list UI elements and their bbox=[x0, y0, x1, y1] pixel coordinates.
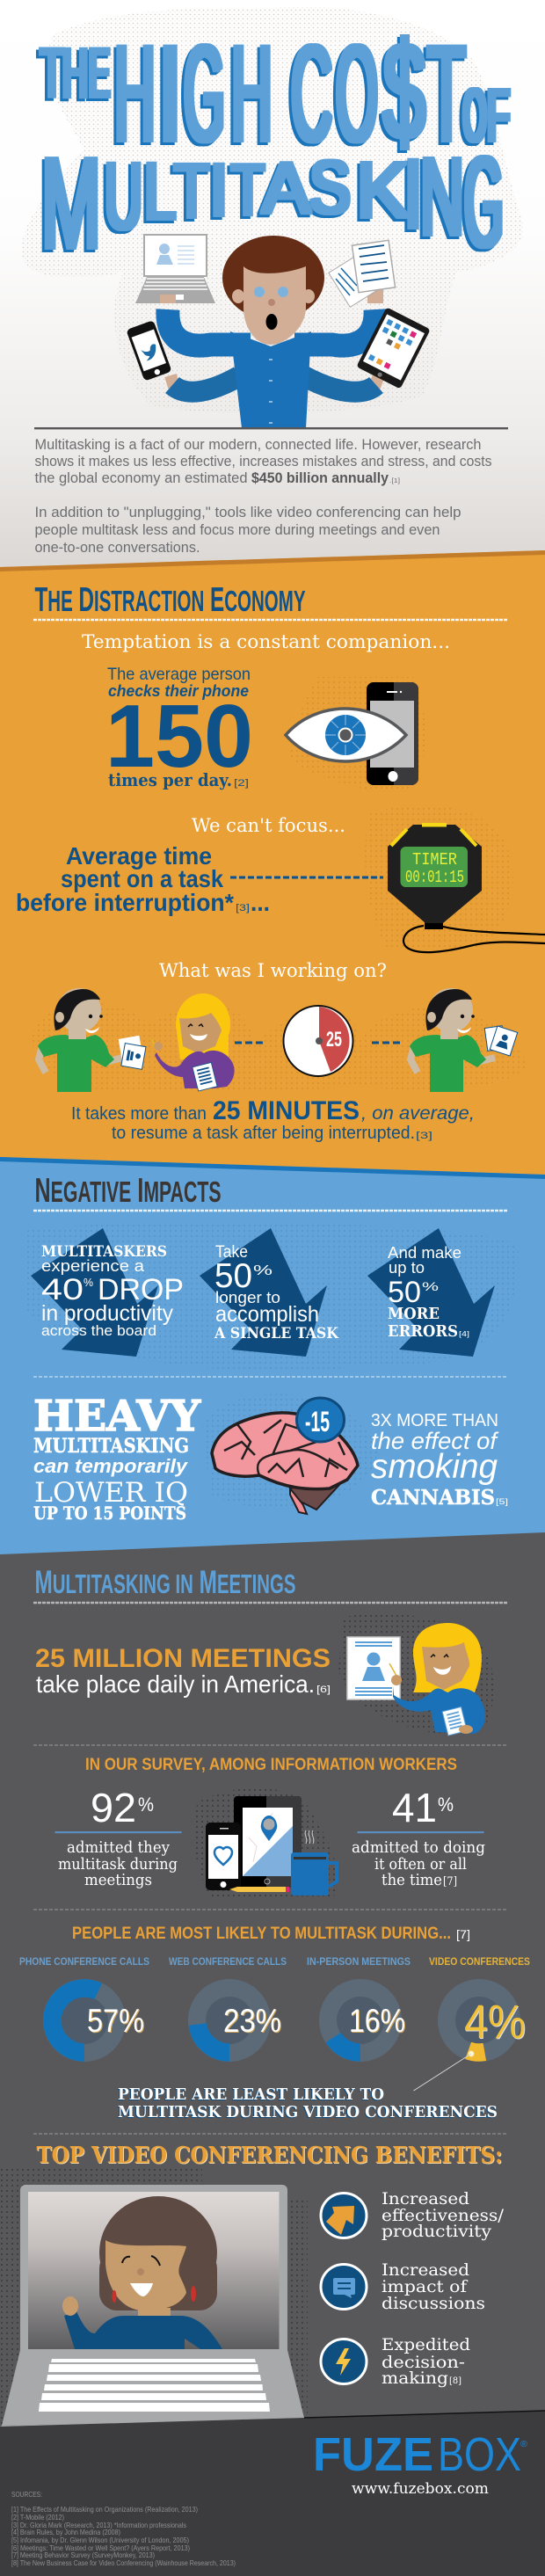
sources: [2] T-Mobile (2012) bbox=[11, 2513, 64, 2521]
text: heavy multitasking lowers IQ: MULTITASKING bbox=[33, 1435, 189, 1458]
stat: 25 minutes to resume: , on average, bbox=[361, 1103, 475, 1124]
stat: 40% drop: % bbox=[84, 1276, 93, 1289]
divider rule bbox=[34, 427, 508, 429]
stat: 25 minutes to resume: [3] bbox=[416, 1131, 432, 1141]
stat: 41%: 41 bbox=[392, 1785, 437, 1830]
stat: 25 million meetings bbox=[35, 1644, 331, 1698]
panel: multitasking in meetings bbox=[0, 1532, 545, 2435]
benefit: effectiveness bbox=[321, 2189, 505, 2241]
stat: average time before interruption: before interruption* bbox=[16, 889, 234, 916]
stat: 40% drop: DROP bbox=[98, 1273, 184, 1306]
chart: 16% in-person meetings bbox=[319, 1979, 405, 2062]
stat: 50% more errors: MORE bbox=[388, 1305, 440, 1323]
title: U bbox=[105, 142, 142, 249]
stat: 40% drop: MULTITASKERS bbox=[41, 1243, 167, 1261]
stat: 50% more errors: % bbox=[422, 1279, 439, 1293]
title: A bbox=[262, 147, 311, 229]
benefit: decision-making bbox=[321, 2335, 470, 2388]
donut labels: VIDEO CONFERENCES bbox=[429, 1955, 530, 1968]
intro text: .[1] bbox=[389, 478, 400, 484]
sources: SOURCES: bbox=[11, 2490, 42, 2499]
benefit: impact of discussions: Increased bbox=[382, 2260, 469, 2280]
chart: 23% web conference calls: 23% bbox=[223, 2003, 281, 2039]
subheading: what was I working on: What was I working on? bbox=[159, 960, 387, 981]
stat: 50% more errors bbox=[388, 1244, 469, 1341]
head bbox=[222, 236, 324, 345]
stat: 50% longer: accomplish bbox=[215, 1302, 319, 1327]
stat: 40% drop bbox=[41, 1243, 184, 1339]
intro text: one-to-one conversations. bbox=[35, 540, 200, 556]
subheading: most likely to multitask: [7] bbox=[456, 1927, 470, 1941]
heading: MULTITASKING IN MEETINGS bbox=[35, 1564, 295, 1600]
text: 3x more than smoking cannabis: [5] bbox=[496, 1497, 508, 1506]
title: M bbox=[41, 131, 101, 276]
callout: least likely bbox=[118, 2085, 498, 2121]
subheading: temptation: Temptation is a constant companion... bbox=[82, 631, 450, 652]
text: heavy multitasking lowers IQ: LOWER IQ bbox=[34, 1477, 188, 1509]
stat: 150 checks: checks their phone bbox=[108, 682, 249, 700]
sources: [8] The New Business Case for Video Conferencing (Wainhouse Research, 2013) bbox=[11, 2558, 236, 2567]
sources: [4] Brain Rules, by John Medina (2008) bbox=[11, 2528, 120, 2536]
sources: [3] Dr. Gloria Mark (Research, 2013) *Information professionals bbox=[11, 2521, 186, 2529]
title: H bbox=[231, 18, 272, 171]
logo: fuzebox: ® bbox=[520, 2440, 528, 2449]
icon: 25 minute clock: 25 bbox=[326, 1028, 342, 1052]
stat: average time before interruption: Average time bbox=[66, 842, 212, 870]
illustration: woman interrupting bbox=[152, 993, 235, 1091]
subheading: survey: IN OUR SURVEY, AMONG INFORMATION WORKERS bbox=[85, 1756, 457, 1774]
title: T bbox=[231, 149, 265, 230]
title: C bbox=[291, 18, 332, 171]
arms and torso bbox=[168, 286, 379, 428]
stat: 50% longer: 50 bbox=[214, 1257, 252, 1295]
stat: 40% drop: across the board bbox=[41, 1322, 156, 1339]
subheading: most likely to multitask: PEOPLE ARE MOST LIKELY TO MULTITASK DURING... bbox=[72, 1925, 451, 1943]
intro text: Multitasking is a fact of our modern, connected life. However, research bbox=[35, 437, 482, 453]
icon: stopwatch: TIMER bbox=[412, 850, 457, 870]
benefit: impact of discussions: discussions bbox=[382, 2294, 485, 2313]
stat: 50% more errors: ERRORS bbox=[388, 1322, 458, 1341]
sources: [5] Infomania, by Dr. Glenn Wilson (University of London, 2005) bbox=[11, 2536, 189, 2544]
logo: fuzebox: BOX bbox=[438, 2428, 521, 2481]
stat: 92%: multitask during bbox=[58, 1855, 178, 1874]
text: heavy multitasking lowers IQ: UP TO 15 POINTS bbox=[33, 1503, 186, 1524]
benefit: decision-making: [8] bbox=[449, 2376, 461, 2386]
stat: 25 minutes to resume: to resume a task after being interrupted. bbox=[112, 1124, 415, 1143]
illustration: man resuming task bbox=[410, 988, 518, 1092]
icon: devices and coffee mug bbox=[206, 1796, 337, 1896]
stat: 25 minutes to resume: 25 MINUTES bbox=[213, 1096, 360, 1125]
text: 3x more than smoking cannabis bbox=[371, 1411, 508, 1510]
logo: fuzebox: FUZE bbox=[313, 2428, 433, 2481]
text: 3x more than smoking cannabis: smoking bbox=[371, 1448, 498, 1486]
stat: 50% more errors: up to bbox=[389, 1259, 425, 1277]
text: 3x more than smoking cannabis: 3X MORE THAN bbox=[371, 1411, 498, 1430]
heading: NEGATIVE IMPACTS bbox=[35, 1172, 222, 1210]
illustration: woman on laptop video call bbox=[2, 2185, 304, 2426]
title: I bbox=[156, 18, 184, 171]
title: K bbox=[356, 147, 409, 235]
illustration: woman presenting bbox=[347, 1623, 485, 1736]
stat: 50% longer bbox=[214, 1243, 339, 1343]
title: S bbox=[309, 146, 351, 229]
icon: 25 minute clock bbox=[283, 1006, 353, 1076]
text: heavy multitasking lowers IQ bbox=[33, 1392, 201, 1524]
title: T bbox=[427, 18, 466, 171]
sources: [7] Meeting Behavior Survey (SurveyMonkey, 2013) bbox=[11, 2551, 155, 2559]
figure: multitasking man bbox=[126, 235, 431, 428]
stat: average time before interruption bbox=[16, 842, 270, 916]
title: T bbox=[174, 149, 209, 234]
chart: 57% phone conference calls bbox=[43, 1979, 144, 2062]
benefit: impact of discussions: impact of bbox=[382, 2277, 469, 2296]
stat: 41%: % bbox=[438, 1794, 454, 1816]
title: T bbox=[40, 33, 63, 112]
stat: 92%: % bbox=[138, 1794, 154, 1816]
title: E bbox=[89, 33, 110, 112]
stat: 92%: 92 bbox=[91, 1785, 136, 1830]
chart: 4% video conferences: 4% bbox=[464, 1996, 526, 2048]
stat: 25 million meetings: 25 MILLION MEETINGS bbox=[35, 1644, 331, 1673]
stat: 50% longer: Take bbox=[215, 1243, 248, 1262]
title: $ bbox=[383, 14, 425, 169]
icon: brain with -15 badge bbox=[212, 1398, 358, 1514]
callout: least likely: PEOPLE ARE LEAST LIKELY TO bbox=[118, 2085, 384, 2104]
arrow: errors bbox=[367, 1228, 495, 1357]
benefit: effectiveness: productivity bbox=[382, 2222, 491, 2241]
title: I bbox=[209, 149, 229, 231]
panel: header background bbox=[0, 0, 545, 580]
arrow: productivity bbox=[31, 1228, 158, 1357]
stat: 50% more errors: And make bbox=[388, 1244, 461, 1262]
stat: 25 minutes to resume bbox=[71, 1096, 475, 1143]
icon: eye and phone bbox=[286, 682, 418, 785]
intro text bbox=[35, 437, 492, 556]
papers bbox=[329, 240, 396, 307]
chart: 23% web conference calls bbox=[188, 1979, 281, 2062]
intro text: $450 billion annually bbox=[251, 470, 389, 486]
benefit: decision-making: Expedited bbox=[382, 2335, 470, 2354]
stat: average time before interruption: [3] bbox=[236, 903, 250, 913]
website url: www.fuzebox.com bbox=[352, 2480, 489, 2498]
stat: 92%: meetings bbox=[84, 1871, 152, 1889]
stat: 41% bbox=[352, 1785, 485, 1889]
stat: 41%: admitted to doing bbox=[352, 1838, 485, 1857]
stat: 41%: the time bbox=[382, 1871, 442, 1889]
sources: [6] Meetings: Time Wasted or Well Spent? (Ayers Report, 2013) bbox=[11, 2543, 190, 2552]
dashes to clock bbox=[235, 1041, 402, 1044]
benefit: decision-making: making bbox=[382, 2369, 448, 2388]
stat: 50% more errors: [4] bbox=[459, 1330, 469, 1338]
stat: average time before interruption: ... bbox=[251, 889, 270, 916]
title: H bbox=[62, 33, 88, 112]
arrow: single task bbox=[200, 1228, 327, 1357]
title: O bbox=[336, 18, 378, 171]
stat: 150 checks: The average person bbox=[107, 665, 251, 684]
icon: stopwatch: 00:01:15 bbox=[405, 868, 464, 887]
stat: 150 checks: [2] bbox=[234, 778, 249, 789]
subheading: focus: We can't focus... bbox=[192, 815, 345, 836]
stat: 41%: it often or all bbox=[374, 1855, 467, 1874]
stat: 50% longer: A SINGLE TASK bbox=[214, 1325, 339, 1343]
stat: 50% more errors: 50 bbox=[388, 1276, 421, 1309]
logo: fuzebox bbox=[313, 2428, 528, 2481]
text: heavy multitasking lowers IQ: can temporarily bbox=[33, 1455, 189, 1477]
benefit: decision-making: decision- bbox=[382, 2353, 465, 2372]
intro text: the global economy an estimated bbox=[35, 470, 248, 486]
stat: 92% bbox=[54, 1785, 181, 1889]
stippled dots behind title and figure bbox=[22, 7, 523, 413]
benefit: effectiveness: Increased bbox=[382, 2189, 469, 2209]
intro text: people multitask less and focus more during meetings and even bbox=[35, 522, 440, 538]
tablet bbox=[356, 307, 431, 389]
stat: 25 minutes to resume: It takes more than bbox=[71, 1104, 207, 1124]
benefit: effectiveness: effectiveness/ bbox=[382, 2206, 505, 2225]
title: H bbox=[114, 18, 156, 171]
illustration: man with papers bbox=[38, 988, 148, 1092]
panel: the distraction economy bbox=[0, 550, 545, 1175]
donut labels: IN-PERSON MEETINGS bbox=[307, 1955, 411, 1968]
icon: stopwatch bbox=[388, 823, 545, 952]
stat: 92%: admitted they bbox=[67, 1838, 171, 1857]
stat: 40% drop: experience a bbox=[41, 1257, 145, 1275]
stat: 40% drop: 40 bbox=[41, 1273, 84, 1306]
chart: 4% video conferences bbox=[413, 1979, 526, 2091]
laptop bbox=[135, 235, 215, 303]
panel: negative impacts bbox=[0, 1157, 545, 1565]
benefit: impact of discussions bbox=[321, 2260, 485, 2313]
stat: 150 checks: 150 bbox=[105, 688, 253, 786]
stat: 50% longer: % bbox=[253, 1263, 272, 1278]
chart: 16% in-person meetings: 16% bbox=[349, 2003, 405, 2039]
stat: 25 million meetings: take place daily in America. bbox=[36, 1670, 315, 1698]
title: L bbox=[144, 147, 176, 236]
donut labels: PHONE CONFERENCE CALLS bbox=[19, 1955, 149, 1968]
stat: 25 million meetings: [6] bbox=[316, 1685, 331, 1695]
stat: 150 checks: times per day. bbox=[108, 769, 232, 790]
sources: [1] The Effects of Multitasking on Organizations (Realization, 2013) bbox=[11, 2505, 198, 2514]
title bbox=[40, 14, 510, 276]
intro text: shows it makes us less effective, increases mistakes and stress, and costs bbox=[35, 454, 492, 469]
stat: 40% drop: in productivity bbox=[41, 1301, 173, 1326]
text: 3x more than smoking cannabis: the effect of bbox=[371, 1428, 499, 1454]
title: I bbox=[403, 139, 423, 249]
title: G bbox=[184, 18, 225, 171]
heading: THE DISTRACTION ECONOMY bbox=[35, 581, 306, 619]
sources bbox=[11, 2490, 236, 2567]
title: N bbox=[420, 135, 464, 258]
donut labels bbox=[19, 1955, 530, 1968]
stat: 41%: [7] bbox=[443, 1875, 457, 1888]
chart: 57% phone conference calls: 57% bbox=[87, 2003, 144, 2039]
intro text: In addition to "unplugging," tools like video conferencing can help bbox=[35, 505, 461, 520]
stat: 50% longer: longer to bbox=[215, 1289, 280, 1306]
icon: brain with -15 badge: -15 bbox=[305, 1406, 330, 1437]
phone with bird bbox=[126, 320, 172, 382]
panel: footer bbox=[0, 2411, 545, 2576]
donut labels: WEB CONFERENCE CALLS bbox=[169, 1955, 287, 1968]
title: O bbox=[463, 74, 486, 156]
title: F bbox=[487, 74, 510, 156]
callout: least likely: MULTITASK DURING VIDEO CONFERENCES bbox=[118, 2103, 498, 2121]
text: heavy multitasking lowers IQ: HEAVY bbox=[33, 1392, 201, 1441]
stat: average time before interruption: spent on a task bbox=[61, 865, 223, 892]
text: 3x more than smoking cannabis: CANNABIS bbox=[371, 1486, 495, 1510]
